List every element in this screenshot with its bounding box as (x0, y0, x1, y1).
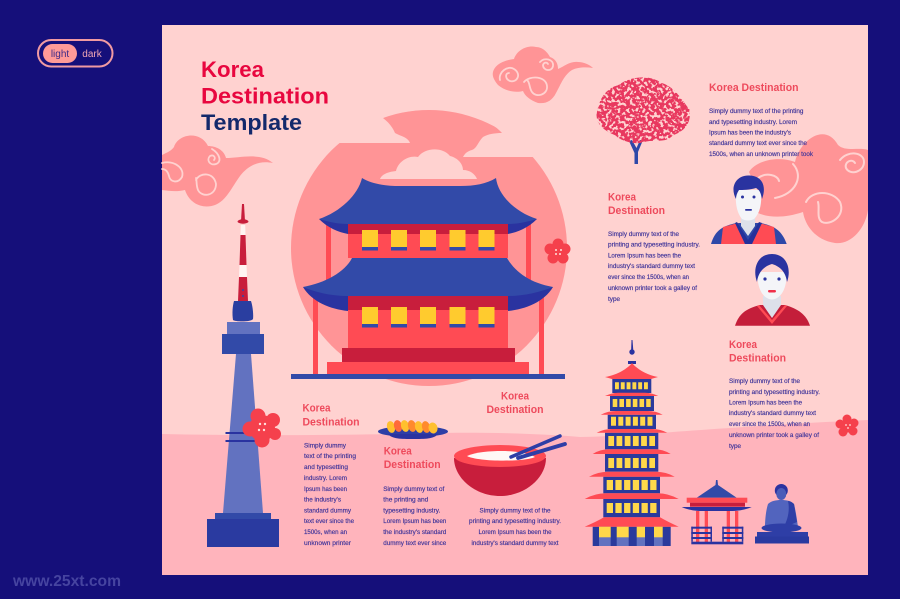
text block: middle: unknown printer took a galley of (608, 285, 697, 292)
text block: column 2: typesetting industry. (383, 508, 440, 514)
pagoda spire (628, 340, 636, 364)
text block: column 1: unknown printer (304, 540, 352, 547)
text block: column 3: Korea (501, 390, 530, 402)
palace columns (313, 222, 544, 375)
text block: middle: Korea (608, 192, 637, 204)
text block: bottom right: Korea (729, 339, 758, 351)
text block: column 1: and typesetting (304, 464, 348, 471)
text block: bottom right: Lorem Ipsum has been the (729, 400, 802, 406)
person: woman (735, 254, 810, 326)
pagoda roofs (585, 363, 679, 527)
food plate (378, 419, 448, 439)
text block: middle: Simply dummy text of the (608, 231, 679, 238)
tower pod (232, 301, 253, 321)
text block: column 2: Korea (384, 446, 412, 458)
sun with cloud cutouts (280, 100, 600, 386)
pagoda ground floor (599, 527, 663, 546)
toggle: light dark (38, 40, 112, 66)
text block: column 1: text of the printing (304, 453, 356, 460)
text block: top right: Ipsum has been the industry's (709, 130, 792, 136)
gazebo (682, 480, 752, 544)
text block: column 1: the industry's (304, 496, 342, 504)
title: Destination (201, 84, 329, 108)
text block: column 1: 1500s, when an (304, 529, 347, 536)
text block: column 1 (302, 402, 360, 547)
tower base (215, 513, 271, 519)
toggle: light dark: light (51, 49, 69, 60)
text block: middle: Destination (608, 205, 665, 217)
text block: top right: 1500s, when an unknown printer took (709, 151, 814, 158)
text block: middle (608, 192, 700, 303)
cloud: left (162, 136, 273, 206)
text block: column 1: Ipsum has been (304, 486, 347, 493)
title: Korea (201, 57, 264, 82)
text block: bottom right: type (729, 443, 741, 450)
text block: bottom right: Destination (729, 352, 786, 364)
text block: column 1: Destination (302, 416, 360, 428)
tower spire (238, 204, 248, 301)
text block: top right: Korea Destination (709, 82, 799, 94)
tower shaft (223, 354, 263, 513)
text block: top right: Simply dummy text of the printing (709, 108, 804, 115)
text block: column 2: Simply dummy text of (383, 486, 444, 493)
text block: column 1: text ever since the (304, 518, 354, 525)
text block: middle: type (608, 296, 620, 303)
flower: right (836, 414, 858, 436)
palace upper floor (319, 178, 537, 258)
text block: column 3 (469, 390, 561, 547)
text block: column 3: Simply dummy text of the (480, 508, 551, 514)
pagoda body (593, 378, 671, 546)
text block: middle: Lorem Ipsum has been the (608, 252, 681, 260)
text block: column 2: the printing and (383, 496, 429, 504)
title (201, 57, 329, 135)
pagoda windows (607, 386, 657, 508)
text block: middle: ever since the 1500s, when an (608, 274, 689, 281)
flower: by tower (242, 408, 281, 448)
text block: bottom right: Simply dummy text of the (729, 378, 800, 385)
text block: middle: printing and typesetting industry. (608, 242, 700, 248)
text block: bottom right: printing and typesetting industry. (729, 389, 820, 396)
text block: column 3: printing and typesetting industry. (469, 518, 561, 525)
person: man (711, 175, 787, 244)
text block: column 3: industry's standard dummy text (472, 540, 559, 547)
pagoda (585, 340, 679, 546)
flower: by palace (544, 238, 570, 264)
panel: background (162, 25, 868, 575)
cloud: right (749, 134, 868, 243)
watermark: www.25xt.com (12, 573, 121, 590)
text block: top right: and typesetting industry. Lorem (709, 119, 797, 126)
text block: top right (709, 82, 814, 158)
text block: column 1: standard dummy (304, 508, 352, 514)
tower (207, 204, 279, 547)
chopsticks (511, 436, 565, 458)
palace (291, 178, 565, 379)
text block: column 1: Simply dummy (304, 442, 347, 450)
text block: bottom right: industry's standard dummy text (729, 410, 816, 417)
cloud: top (493, 47, 593, 103)
text block: column 2: dummy text ever since (383, 540, 447, 547)
text block: top right: standard dummy text ever since the (709, 140, 807, 147)
text block: column 1: industry. Lorem (304, 475, 347, 482)
text block: column 3: Lorem Ipsum has been the (478, 529, 552, 536)
text block: bottom right: unknown printer took a galley of (729, 432, 819, 439)
text block: middle: industry's standard dummy text (608, 263, 695, 270)
rice bowl (454, 436, 565, 496)
title: Template (201, 110, 302, 135)
text block: column 3: Destination (486, 404, 544, 416)
text block: column 2: Destination (384, 459, 441, 471)
tree (598, 79, 688, 164)
toggle: light dark: dark (82, 49, 103, 60)
palace steps (291, 348, 565, 379)
palace lower floor (303, 258, 553, 348)
buddha statue (755, 484, 809, 544)
text block: bottom right: ever since the 1500s, when an (729, 421, 810, 428)
text block: column 1: Korea (302, 402, 331, 414)
text block: bottom right (729, 339, 820, 450)
text block: column 2 (383, 446, 447, 547)
text block: column 2: Lorem Ipsum has been (383, 518, 447, 525)
text block: column 2: the industry's standard (383, 529, 447, 536)
